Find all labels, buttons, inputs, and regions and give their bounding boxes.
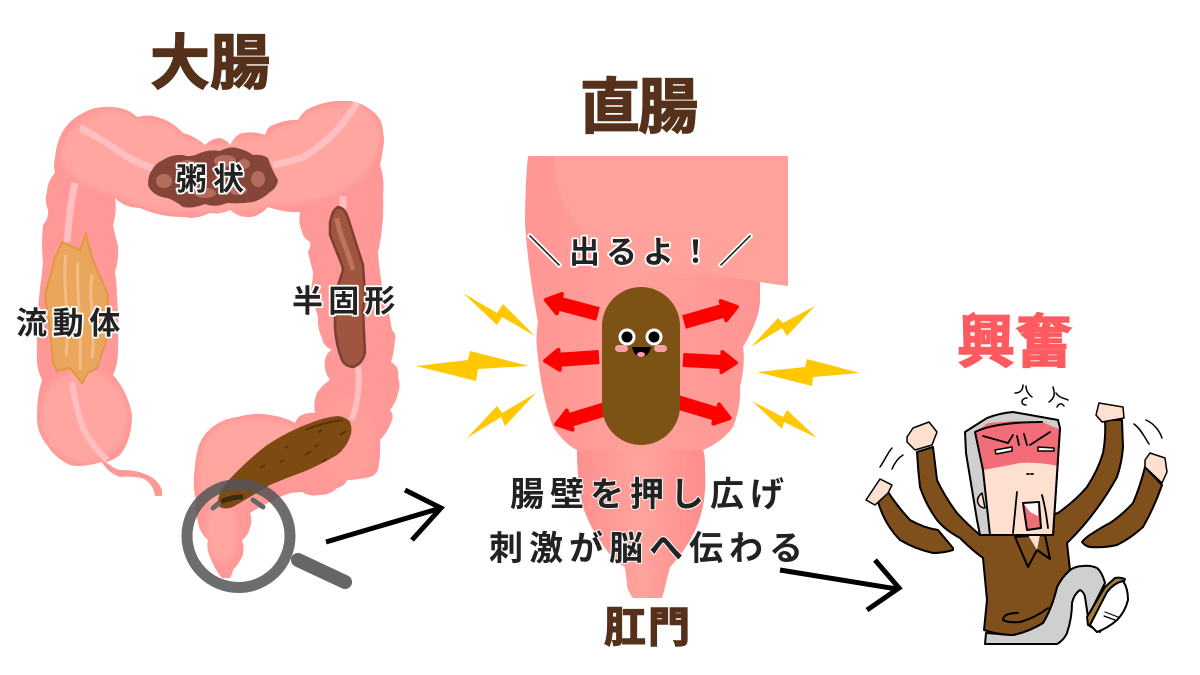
anger marks and motion lines bbox=[880, 385, 1162, 469]
eyes bbox=[995, 447, 1054, 454]
caption line 2: 刺激が脳へ伝わる bbox=[489, 529, 809, 568]
fists bbox=[866, 403, 1167, 505]
head bbox=[965, 412, 1060, 535]
face right edge bbox=[975, 422, 1060, 535]
stool: porridge bbox=[148, 147, 278, 208]
body and raised arms bbox=[917, 420, 1123, 635]
rectum illustration bbox=[525, 156, 788, 598]
caption line 1: 腸壁を押し広げ bbox=[510, 476, 790, 514]
trousers bbox=[985, 566, 1105, 644]
label: anus: 肛門 bbox=[604, 604, 690, 651]
colon body bbox=[37, 101, 400, 578]
arrow: colon to rectum bbox=[326, 490, 441, 542]
facial lines bbox=[983, 432, 1050, 533]
arrow: to brain reaction bbox=[780, 560, 899, 610]
stool: liquid bbox=[45, 234, 108, 383]
rectum upper fold bbox=[555, 156, 788, 286]
red pressure arrows bbox=[543, 290, 740, 434]
callout: coming out bbox=[528, 233, 752, 270]
icon: magnifying glass bbox=[187, 484, 345, 588]
title: rectum: 直腸 bbox=[580, 74, 698, 141]
callout: coming out: 出るよ！ bbox=[569, 235, 717, 270]
face bbox=[975, 421, 1059, 534]
callout: coming out: ＼ bbox=[528, 233, 561, 270]
ear bbox=[978, 493, 985, 508]
colon pale bands bbox=[67, 103, 359, 460]
lightning bolts bbox=[416, 293, 860, 438]
poop character bbox=[602, 287, 680, 445]
mouth bbox=[1023, 502, 1041, 530]
label: semi-solid: 半固形 bbox=[292, 284, 401, 319]
excited man illustration bbox=[866, 385, 1167, 644]
collar bbox=[1015, 535, 1050, 567]
stool: semi-solid bbox=[330, 207, 365, 367]
label: liquid: 流動体 bbox=[16, 306, 126, 341]
label: porridge: 粥状 bbox=[176, 162, 250, 197]
colon lighter lobes bbox=[41, 104, 380, 562]
right lower arm bbox=[1082, 467, 1162, 547]
stool: formed bbox=[218, 416, 352, 508]
large intestine illustration bbox=[37, 101, 400, 587]
red forehead bbox=[975, 421, 1059, 470]
pocket line bbox=[1003, 608, 1048, 622]
rectum body bbox=[525, 156, 788, 598]
rectum lower shading bbox=[577, 450, 705, 598]
left lower arm bbox=[878, 492, 953, 553]
title: excitement: 興奮 bbox=[957, 310, 1073, 375]
title: large intestine: 大腸 bbox=[150, 30, 270, 97]
shoe bbox=[1087, 578, 1128, 632]
callout: coming out: ／ bbox=[719, 233, 752, 270]
